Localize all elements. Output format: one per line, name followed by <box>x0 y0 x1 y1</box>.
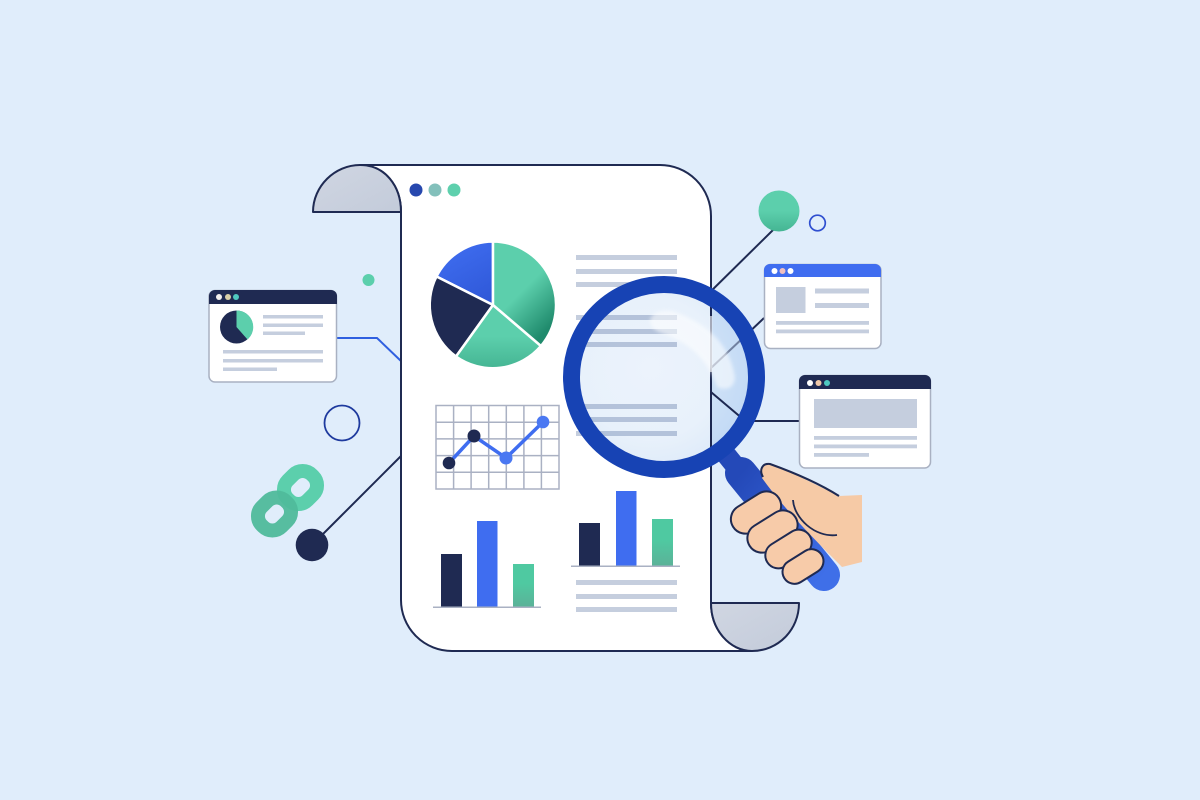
window dots <box>807 380 830 386</box>
magnifying glass <box>572 284 824 575</box>
line chart <box>436 406 559 489</box>
lens highlight <box>650 311 735 389</box>
finger 2 <box>742 505 803 558</box>
connector lines <box>312 230 799 545</box>
hand <box>725 464 862 588</box>
handle <box>724 452 824 575</box>
palm outline <box>761 464 839 496</box>
window text lines <box>223 315 323 371</box>
finger 4 <box>778 545 828 588</box>
window text lines <box>814 436 917 457</box>
page edge fading under highlight <box>710 316 712 372</box>
bar chart: right <box>571 491 680 567</box>
page sheet <box>360 165 752 651</box>
mini pie <box>220 310 253 344</box>
bottom-right curl <box>711 603 799 651</box>
ring <box>572 284 756 470</box>
small green dot <box>362 274 374 286</box>
bar chart: left <box>433 521 541 608</box>
data line <box>449 422 543 463</box>
window dots <box>772 268 794 274</box>
window frame <box>764 264 881 348</box>
green node <box>758 190 800 232</box>
thumb crease <box>793 500 837 535</box>
image placeholder <box>814 399 917 428</box>
page header dots <box>410 184 460 196</box>
document page <box>313 165 799 651</box>
window: right bottom <box>799 375 931 468</box>
data points <box>443 416 549 469</box>
window: left dashboard <box>209 290 337 382</box>
top-left curl <box>313 165 401 212</box>
image placeholder <box>776 287 806 313</box>
pie chart <box>430 242 556 368</box>
window header <box>764 264 881 277</box>
palm <box>762 464 862 567</box>
window: right top <box>764 264 881 348</box>
small outlined circle <box>810 215 825 231</box>
window text lines <box>776 288 869 333</box>
text lines on page <box>576 255 677 612</box>
window header <box>799 375 931 389</box>
finger 3 <box>760 525 817 573</box>
window header <box>209 290 337 304</box>
window frame <box>209 290 336 382</box>
lens <box>580 293 748 461</box>
finger 1 <box>725 486 787 539</box>
chart grid <box>436 406 559 489</box>
window dots <box>216 294 239 300</box>
outlined circle <box>324 406 360 440</box>
window frame <box>800 376 930 468</box>
icon: chain link <box>253 466 322 536</box>
navy node <box>296 529 328 561</box>
